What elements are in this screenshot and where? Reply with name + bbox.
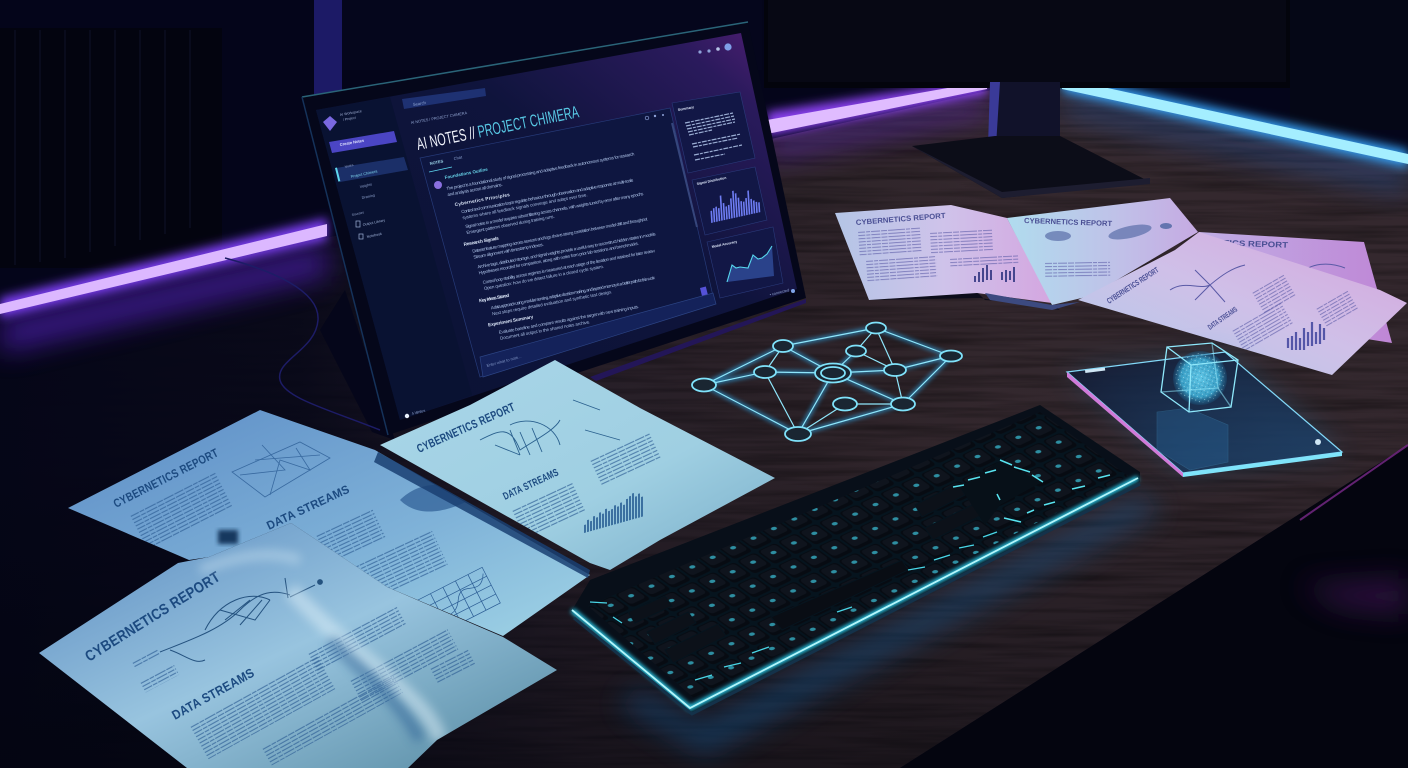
breadcrumb: AI NOTES / PROJECT CHIMERA xyxy=(410,111,468,125)
right paper stack: back sheet: NETICS REPORT xyxy=(1210,238,1288,250)
side panel: area chart xyxy=(707,227,783,298)
body copy, second column xyxy=(316,510,386,557)
tablet screen xyxy=(316,33,797,420)
notes body text: Hypotheses recorded for comparison, along with notes from prior lab sessions and benchmarks. xyxy=(478,241,639,275)
LED strip: purple middle xyxy=(767,78,987,136)
notes body text xyxy=(446,150,671,345)
keyboard xyxy=(571,405,1160,755)
main notes card: Chat xyxy=(453,154,463,161)
notes body text: Next steps require detailed evaluation and synthetic test design. xyxy=(492,289,613,316)
sidebar navigation: Sources xyxy=(351,210,365,217)
booklet bar chart xyxy=(975,265,1014,282)
keyboard desk glow xyxy=(620,495,1160,755)
status bar: 4 Writes xyxy=(411,409,426,416)
acrylic plate with holographic cube xyxy=(1067,343,1342,477)
tablet stand and cable xyxy=(225,258,395,440)
main notes card: Foundations Outline xyxy=(444,167,489,180)
notes body text: systems where all feedback signals converge and adapt over time. xyxy=(462,192,588,220)
sidebar xyxy=(316,97,472,420)
sketch labels xyxy=(132,650,160,667)
cube reflection xyxy=(1157,408,1228,470)
keyboard front highlights xyxy=(590,532,997,680)
notes body text: Document all output in the shared notes archive. xyxy=(500,319,591,341)
heading: cybernetics report: CYBERNETICS REPORT xyxy=(111,445,221,511)
notes body text: Experiment Summary xyxy=(488,314,534,328)
notes body text: Open question: how do we detect failure in a closed cycle system. xyxy=(483,264,604,291)
right paper stack: front sheet xyxy=(1078,232,1407,375)
keyboard LED rail glow xyxy=(572,478,1138,708)
notes body text: Key Ideas Stored xyxy=(479,293,510,303)
side panel: area chart: Model Accuracy xyxy=(711,240,738,249)
right paper stack: open booklet: CYBERNETICS REPORT xyxy=(1024,216,1113,228)
plate glow xyxy=(1067,352,1342,473)
toolbar icons xyxy=(645,43,732,120)
status bar xyxy=(405,288,795,418)
paper stack: right sheet under tablet xyxy=(380,360,775,570)
right paper stack: open booklet xyxy=(835,198,1198,310)
notes body text: and analysis across all domains. xyxy=(447,182,503,197)
keyboard chassis xyxy=(571,405,1140,714)
booklet headings: CYBERNETICS REPORT xyxy=(855,211,946,227)
sidebar navigation: Output Library xyxy=(362,218,386,227)
notes body text: Control and communication loops regulate behaviour through observation and adaptive response at multi-scale xyxy=(461,177,634,214)
neural sketch xyxy=(160,578,322,661)
app logo: / Project xyxy=(342,116,356,122)
app logo: AI Workspace xyxy=(339,109,362,117)
notes body text: Control loop stability across regimes is measured at each stage of the iteration and retained for later review xyxy=(482,248,656,285)
heading: data streams: DATA STREAMS xyxy=(169,665,257,723)
sidebar navigation: Insights xyxy=(359,182,373,189)
holographic network diagram xyxy=(692,322,962,441)
neural sketch xyxy=(480,400,620,455)
main notes card xyxy=(420,108,713,377)
cube wireframe xyxy=(1161,343,1238,412)
heading: data streams: DATA STREAMS xyxy=(501,466,561,503)
under-tablet purple glow xyxy=(590,299,806,381)
network glow xyxy=(704,328,951,434)
paper stack: middle left sheet xyxy=(68,410,590,636)
keyboard LED rail xyxy=(572,478,1138,708)
front sheet body copy xyxy=(1252,274,1296,315)
search bar xyxy=(402,88,486,109)
body copy xyxy=(190,656,335,759)
sidebar navigation xyxy=(335,157,408,239)
booklet left page xyxy=(835,205,1052,303)
plate engraving xyxy=(1085,368,1105,373)
notes body text: A data approach using modular sensing, adaptive decision making, and layered memory is a better path for this work xyxy=(490,275,656,310)
heading: data streams: DATA STREAMS xyxy=(264,482,352,533)
new note button: Create Notes xyxy=(339,138,365,147)
shadow of right sheet xyxy=(374,452,590,578)
status bar: • connected xyxy=(769,288,790,297)
right paper stack: back sheet xyxy=(1180,232,1392,343)
notes body text: Cybernetics Principles xyxy=(454,192,511,207)
front sheet chart xyxy=(1288,322,1324,350)
key matrix xyxy=(588,412,1128,698)
app logo xyxy=(323,109,362,131)
body copy xyxy=(130,472,233,551)
network edges xyxy=(704,328,951,434)
scrollbar xyxy=(672,123,697,227)
heading: cybernetics report: CYBERNETICS REPORT xyxy=(82,568,223,665)
notes body text: Emergent patterns observed during training runs. xyxy=(466,214,555,235)
paper stack: front sheet xyxy=(39,523,557,768)
sidebar navigation: Notebook xyxy=(366,232,382,239)
side panel: bar chart: Signal Distribution xyxy=(696,176,727,186)
note input box xyxy=(480,287,716,377)
network sketch xyxy=(232,442,330,497)
notes body text: Stream alignment with timestamp indexes. xyxy=(473,242,544,260)
note input box: Enter what to note... xyxy=(486,354,522,368)
tablet xyxy=(302,22,806,435)
tablet bezel xyxy=(302,22,806,435)
front sheet heading: CYBERNETICS REPORT xyxy=(1105,265,1160,306)
sidebar navigation: Notes xyxy=(344,163,354,169)
right modifier keys xyxy=(915,483,965,517)
sidebar navigation: Project Chimera xyxy=(350,169,379,179)
crumpled sketch xyxy=(400,485,470,512)
notes body text: Evaluate baseline and compare results against the target with new training inputs. xyxy=(498,304,639,335)
front sheet sketch xyxy=(1170,265,1245,302)
sidebar navigation: Drawing xyxy=(361,193,375,200)
ink smudge xyxy=(218,530,238,544)
cube core xyxy=(1173,351,1227,405)
LED strip: cyan right xyxy=(1062,74,1408,168)
mini bar chart xyxy=(585,491,642,533)
notes body text: Signal noise in a model requires robust filtering across channels, with weights tuned by error after many epochs xyxy=(465,191,645,229)
notes body text: Research Signals xyxy=(463,236,500,247)
front sheet subheading: DATA STREAMS xyxy=(1206,305,1239,332)
grid chart xyxy=(418,567,501,620)
heading: cybernetics report: CYBERNETICS REPORT xyxy=(415,400,517,456)
key backlight lines xyxy=(953,460,1110,522)
booklet diagram xyxy=(1045,222,1172,242)
main notes card: NOTES xyxy=(429,158,444,166)
search bar: Search xyxy=(412,100,427,107)
plate surface xyxy=(1067,352,1342,473)
booklet right page xyxy=(1007,198,1198,305)
notes body text: Archive tags, distributed storage, and signal weights provide a useful way to reconstruct hidden states in models xyxy=(477,231,657,269)
side panel: summary xyxy=(672,92,755,173)
notes body text: The project is a foundational study of signal processing and adaptive feedback in autonomous systems for research xyxy=(446,151,635,191)
monitor xyxy=(764,0,1290,198)
network nodes xyxy=(692,322,962,441)
notes body text: Dataset feature mapping across sensors and logs shows strong correlation between model drift and throughput xyxy=(472,216,649,254)
new note button xyxy=(329,131,397,153)
keyboard lip xyxy=(574,484,1140,714)
left modifier keys xyxy=(628,596,672,623)
side panel: summary: Summary xyxy=(677,105,694,112)
space bar xyxy=(771,560,908,630)
body copy xyxy=(512,483,585,533)
side panel: bar chart xyxy=(692,167,767,235)
booklet body copy xyxy=(858,227,922,257)
LED strip: purple left xyxy=(0,218,327,318)
paper creases xyxy=(290,590,440,740)
navigation gap xyxy=(974,466,1040,520)
title: AI NOTES // PROJECT CHIMERA xyxy=(415,102,581,154)
